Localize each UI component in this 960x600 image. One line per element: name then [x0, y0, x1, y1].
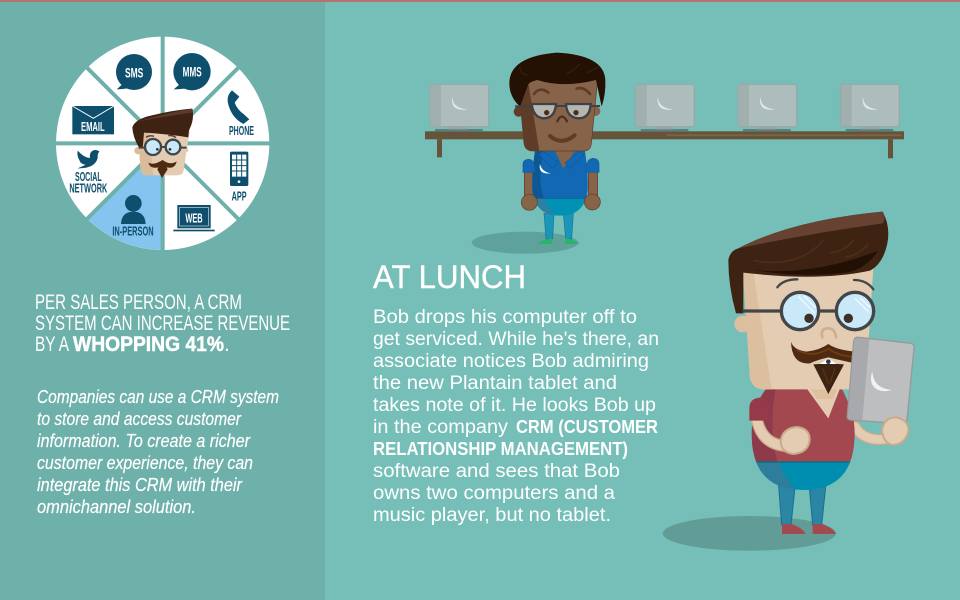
text block: story: takes note of it. He looks Bob up [373, 395, 656, 416]
text block: story: CRM (CUSTOMER [516, 417, 658, 437]
head [728, 212, 888, 394]
text block: companies can use a CRM: customer experience, they can [37, 453, 253, 473]
text block: story: owns two computers and a [373, 483, 615, 504]
text block: companies can use a CRM: information. To create a richer [37, 431, 251, 451]
text block: companies can use a CRM [37, 387, 279, 517]
icon: app: APP [232, 188, 247, 203]
left panel background [0, 0, 325, 600]
icon: in-person: IN-PERSON [112, 224, 154, 238]
icon: MMS bubble: MMS [183, 64, 202, 80]
icon: social network bird: NETWORK [69, 181, 108, 195]
text block: story [373, 307, 659, 526]
computer 2 [636, 84, 694, 131]
headline: per sales person: SYSTEM CAN INCREASE REVENUE [35, 312, 290, 335]
icon: app [230, 152, 248, 203]
icon: web laptop [173, 205, 215, 231]
character: Bob standing [509, 53, 605, 244]
headline: per sales person: WHOPPING 41% [73, 333, 224, 356]
headline: per sales person: PER SALES PERSON, A CRM [35, 291, 242, 314]
left arm and sleeve [749, 398, 810, 454]
text block: story: get serviced. While he's there, an [373, 329, 659, 350]
computer 3 [738, 84, 797, 131]
legs and shoes [778, 482, 836, 534]
computer 4 [841, 84, 899, 131]
omnichannel wheel [54, 35, 271, 252]
desk [425, 131, 904, 158]
icon: MMS bubble [173, 53, 211, 90]
text block: story: music player, but no tablet. [373, 505, 611, 526]
icon: in-person [112, 195, 154, 238]
text block: story: associate notices Bob admiring [373, 351, 649, 372]
text block: story: the new Plantain tablet and [373, 373, 617, 394]
headline: per sales person: BY A [35, 333, 69, 356]
hand on tablet [882, 417, 908, 445]
computer 1 [430, 84, 489, 131]
top edge strip [0, 0, 960, 2]
icon: email envelope: EMAIL [81, 119, 105, 134]
text block: companies can use a CRM: to store and access customer [37, 409, 242, 429]
wheel segments [54, 35, 271, 252]
tablet [847, 337, 914, 424]
icon: SMS bubble [116, 54, 152, 90]
right arm [855, 427, 890, 439]
headline: per sales person [35, 291, 290, 356]
text block: companies can use a CRM: integrate this CRM with their [37, 475, 243, 495]
text block: story: RELATIONSHIP MANAGEMENT) [373, 439, 628, 459]
ground shadow [663, 516, 836, 551]
icon: web laptop: WEB [185, 210, 203, 225]
centre face [132, 109, 193, 178]
text block: companies can use a CRM: Companies can use a CRM system [37, 387, 279, 407]
Bob shadow [472, 232, 578, 254]
icon: SMS bubble: SMS [125, 65, 143, 81]
text block: story: in the company [373, 417, 509, 438]
icon: email envelope [72, 106, 114, 134]
icon: phone [228, 90, 254, 138]
headline: per sales person: . [224, 333, 230, 356]
shop scene: desk, computers and Bob [425, 53, 904, 254]
icon: phone: PHONE [229, 123, 254, 138]
heading: at lunch: AT LUNCH [373, 259, 526, 295]
icon: social network bird: SOCIAL [75, 170, 102, 184]
text block: companies can use a CRM: omnichannel solution. [37, 497, 196, 517]
icon: social network bird [69, 150, 108, 195]
character: man with tablet [663, 212, 914, 551]
text block: story: Bob drops his computer off to [373, 307, 637, 328]
torso [750, 387, 857, 492]
text block: story: software and sees that Bob [373, 461, 620, 482]
